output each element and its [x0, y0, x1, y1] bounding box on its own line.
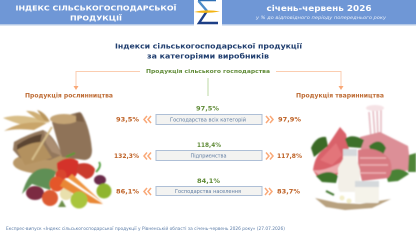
label box: households: Господарства населення [175, 189, 241, 195]
grain pile [13, 152, 77, 174]
cauliflower [60, 188, 72, 200]
tomatoes [56, 170, 66, 180]
sausages [358, 149, 392, 181]
chevrons right [266, 116, 273, 123]
milk glass [355, 181, 379, 203]
value: livestock: 117,8% [277, 153, 302, 160]
label box: all categories: Господарства всіх категорій [170, 116, 246, 124]
label box: households [156, 186, 262, 196]
footer source note: Експрес-випуск «Індекс сільськогосподарської продукції у Рівненській області за січень-червень 2026 року» (27.07.2026) [6, 225, 285, 232]
left sack [13, 130, 62, 160]
header band: period: у % до відповідного періоду попереднього року [255, 15, 386, 21]
arrow: central green [207, 78, 209, 96]
header band: period: січень-червень 2026 [266, 4, 372, 13]
label box: all categories [156, 114, 262, 124]
limes [70, 192, 88, 208]
steak left [313, 127, 349, 178]
parsley [311, 137, 328, 157]
main heading: Індекси сільськогосподарської продукції [115, 42, 303, 50]
label box: enterprises [156, 150, 262, 160]
milk bottle [338, 149, 360, 192]
burlap mat [315, 198, 391, 210]
onion right [94, 175, 106, 185]
header band: left title [0, 0, 194, 26]
chevrons right [265, 188, 272, 195]
header band: left title: ІНДЕКС СІЛЬСЬКОГОСПОДАРСЬКОЇ [16, 4, 177, 12]
subheading: agricultural products: Продукція сільського господарства [146, 69, 270, 75]
chevrons left [144, 188, 151, 195]
red peppers [57, 158, 78, 178]
row 3 [116, 178, 300, 196]
value: livestock: 83,7% [277, 188, 300, 196]
value: crop: 93,5% [116, 116, 139, 124]
value: livestock: 97,9% [278, 116, 301, 124]
main heading [115, 42, 303, 60]
purple onion [26, 186, 44, 200]
icon: sigma logo [194, 0, 221, 25]
value: households total: 84,1% [197, 178, 220, 185]
value: enterprises total: 118,4% [197, 142, 221, 149]
value: crop: 86,1% [116, 188, 139, 196]
chevrons left [144, 116, 151, 123]
heading: livestock products: Продукція тваринництва [296, 94, 384, 100]
main heading: за категоріями виробників [147, 52, 269, 60]
chevrons left [144, 152, 151, 160]
right sack [52, 112, 92, 160]
carrots [60, 179, 103, 204]
leaves [22, 168, 56, 194]
arrow: to crop products [74, 72, 140, 90]
daisies [340, 196, 344, 200]
image: meat and milk [311, 105, 416, 210]
label box: enterprises: Підприємства [190, 154, 227, 160]
heading: crop products: Продукція рослинництва [25, 94, 113, 100]
value: crop: 132,3% [114, 153, 139, 160]
row 1 [116, 106, 301, 124]
arrow: to livestock products [276, 72, 344, 90]
chevrons right [266, 152, 273, 160]
image: grain sacks and vegetables [3, 110, 112, 208]
row 2 [114, 142, 302, 160]
header band: period [222, 0, 416, 26]
ribs [369, 109, 381, 138]
wheat [3, 116, 47, 126]
header band: left title: ПРОДУКЦІЇ [70, 14, 123, 22]
value: all categories total: 97,5% [196, 106, 219, 112]
